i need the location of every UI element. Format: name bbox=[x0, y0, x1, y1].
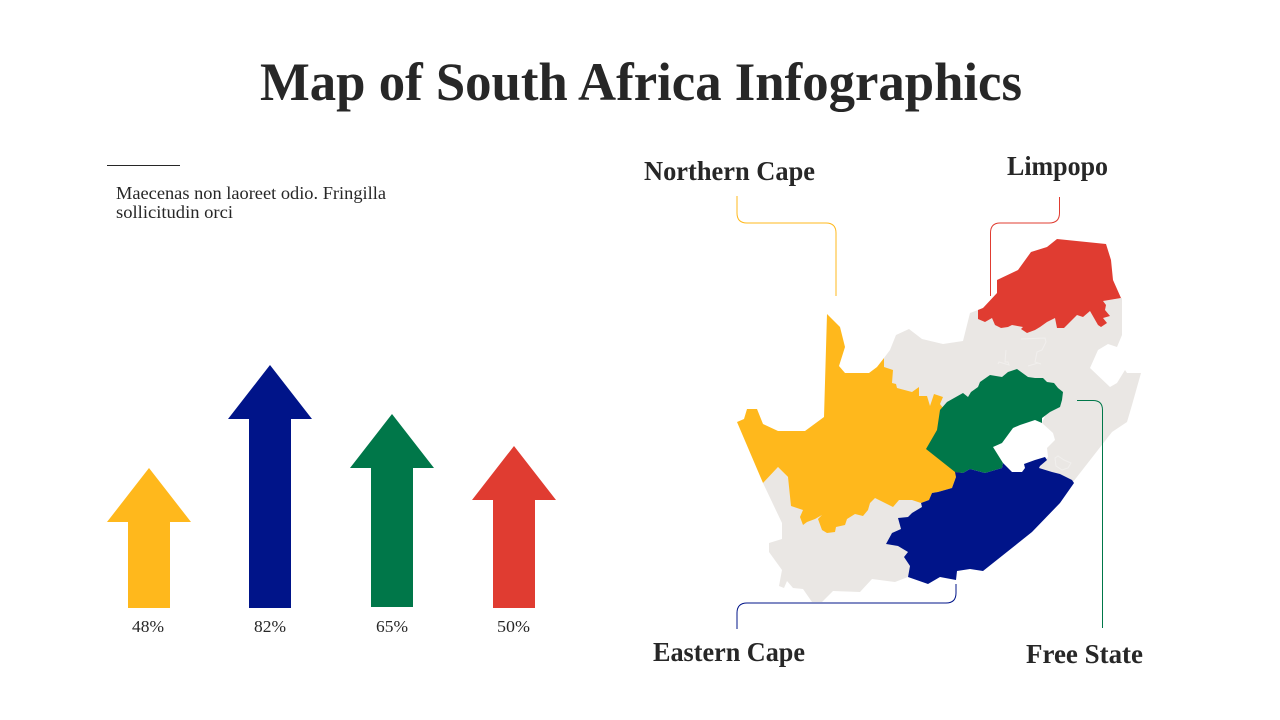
description text bbox=[116, 183, 386, 222]
map of South Africa bbox=[737, 239, 1141, 602]
callout: Northern Cape: Northern Cape bbox=[644, 156, 815, 186]
callout: Eastern Cape bbox=[653, 584, 956, 667]
arrow: 48% yellow: 48% bbox=[132, 617, 164, 636]
title: Map of South Africa Infographics bbox=[260, 52, 1022, 112]
region: Eastern Cape blue bbox=[886, 457, 1074, 584]
region: Northern Cape yellow bbox=[737, 314, 965, 533]
callout: Free State bbox=[1026, 400, 1143, 669]
callout: Limpopo: Limpopo bbox=[1007, 151, 1108, 181]
description text: sollicitudin orci bbox=[116, 202, 233, 222]
callout: Free State: Free State bbox=[1026, 639, 1143, 669]
callout: Eastern Cape: Eastern Cape bbox=[653, 637, 805, 667]
region: Free State green bbox=[926, 369, 1063, 473]
arrow: 50% red bbox=[472, 446, 556, 636]
arrow: 65% green: 65% bbox=[376, 617, 408, 636]
arrow: 65% green bbox=[350, 414, 434, 636]
arrow: 48% yellow bbox=[107, 468, 191, 636]
region: grey Western Cape bbox=[763, 467, 925, 602]
arrow: 50% red: 50% bbox=[497, 617, 530, 636]
region: Limpopo red bbox=[978, 239, 1121, 333]
callout: Northern Cape bbox=[644, 156, 836, 296]
arrow: 82% blue bbox=[228, 365, 312, 636]
callout: Limpopo bbox=[990, 151, 1108, 296]
faint internal borders bbox=[998, 338, 1071, 470]
panel: arrow chart bbox=[107, 165, 556, 636]
description text: Maecenas non laoreet odio. Fringilla bbox=[116, 183, 386, 203]
arrow: 82% blue: 82% bbox=[254, 617, 286, 636]
region: grey north-east provinces bbox=[884, 298, 1141, 482]
